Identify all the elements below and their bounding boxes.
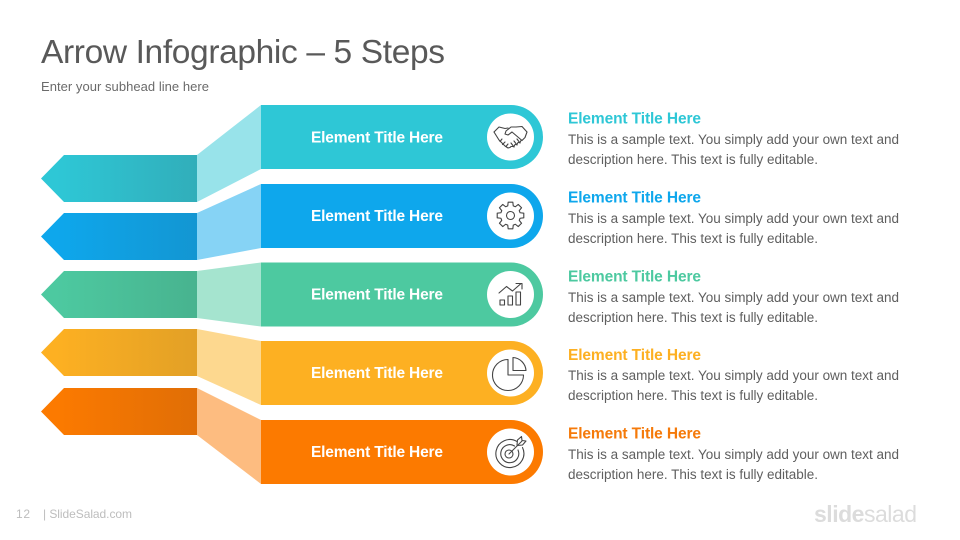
heading 4: Element Title Here — [568, 347, 701, 364]
description 1 — [568, 110, 899, 167]
body 1: description here. This text is fully editable. — [568, 152, 818, 167]
pill 3 — [261, 262, 543, 326]
body 2: description here. This text is fully editable. — [568, 231, 818, 246]
heading 5: Element Title Here — [568, 426, 701, 442]
arrow 4 — [41, 329, 197, 376]
body 2: This is a sample text. You simply add your own text and — [568, 211, 899, 226]
step 1 group — [41, 105, 899, 202]
subhead: Enter your subhead line here — [41, 79, 209, 94]
icon: target — [487, 428, 534, 476]
footer site name: | SlideSalad.com — [43, 507, 132, 521]
pill 2 — [261, 184, 543, 248]
pill 1 — [261, 105, 543, 169]
connector 1 — [197, 105, 261, 202]
heading 3: Element Title Here — [568, 268, 701, 286]
connector 3 — [197, 262, 261, 326]
arrow 5 — [41, 388, 197, 435]
connector 2 — [197, 184, 261, 260]
watermark logo: slidesalad — [814, 501, 917, 527]
heading 1: Element Title Here — [568, 110, 701, 128]
connector 5 — [197, 388, 261, 484]
icon: gear — [487, 192, 534, 240]
step 3 group — [41, 262, 899, 326]
body 4: description here. This text is fully editable. — [568, 388, 818, 403]
arrow 2 — [41, 213, 197, 260]
heading 2: Element Title Here — [568, 190, 701, 206]
body 5: This is a sample text. You simply add your own text and — [568, 447, 899, 462]
pill label 5: Element Title Here — [311, 444, 443, 461]
body 1: This is a sample text. You simply add your own text and — [568, 132, 899, 147]
description 5 — [568, 426, 899, 482]
description 2 — [568, 190, 899, 246]
arrow 3 — [41, 271, 197, 318]
pill 4 — [261, 341, 543, 405]
icon: pie chart — [487, 350, 534, 396]
step 5 group — [41, 388, 899, 484]
pill label 2: Element Title Here — [311, 208, 443, 225]
body 4: This is a sample text. You simply add your own text and — [568, 368, 899, 383]
body 3: This is a sample text. You simply add your own text and — [568, 290, 899, 305]
step 4 group — [41, 329, 899, 405]
pill label 3: Element Title Here — [311, 286, 443, 304]
pill label 4: Element Title Here — [311, 365, 443, 382]
body 5: description here. This text is fully editable. — [568, 467, 818, 482]
icon: growth chart — [487, 271, 534, 318]
description 3 — [568, 268, 899, 325]
pill label 1: Element Title Here — [311, 130, 443, 146]
footer page number: 12 — [16, 507, 30, 521]
body 3: description here. This text is fully editable. — [568, 310, 818, 325]
arrow 1 — [41, 155, 197, 202]
title: Arrow Infographic – 5 Steps — [41, 34, 445, 71]
step 2 group — [41, 184, 899, 260]
connector 4 — [197, 329, 261, 405]
icon: handshake — [487, 114, 534, 160]
description 4 — [568, 347, 899, 403]
pill 5 — [261, 420, 543, 484]
